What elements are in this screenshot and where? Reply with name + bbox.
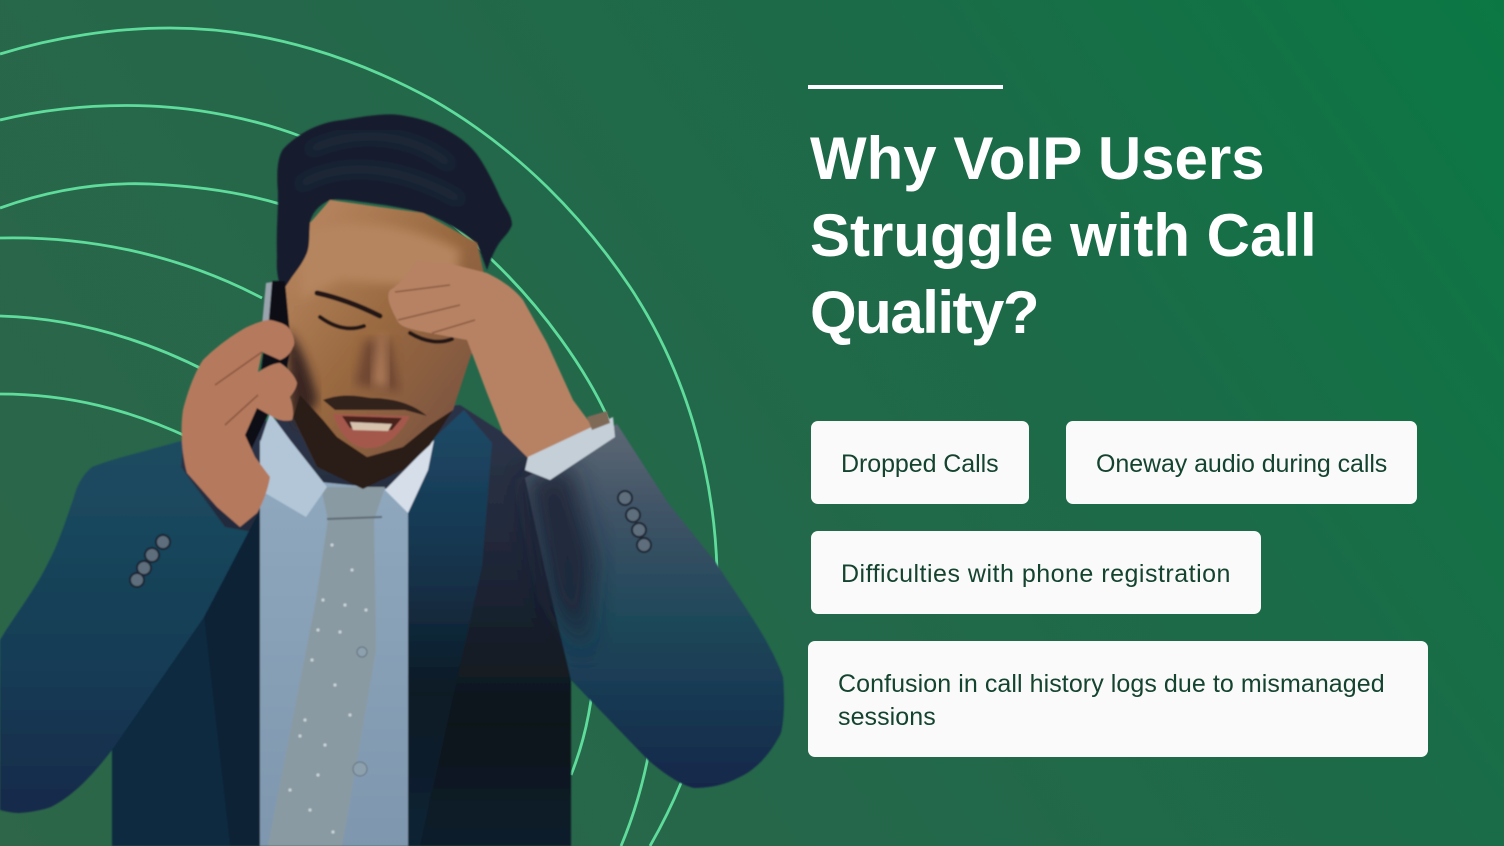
hair [277,114,512,292]
eyes and brows [317,293,452,342]
card: call history: sessions [838,703,936,731]
hand holding phone [182,320,297,527]
accent rule [808,85,1003,89]
card: call history [808,641,1428,757]
cuff buttons left [130,535,170,587]
title: Why VoIP Users [810,125,1265,192]
shirt cuff and watch [525,411,615,480]
tie [268,487,385,846]
shirt buttons [353,647,367,776]
beard [293,395,453,489]
left sleeve [0,440,253,813]
jacket body [112,405,571,846]
card: dropped calls [811,421,1029,504]
mouth [333,414,410,448]
right sleeve [525,424,784,788]
card: phone registration: Difficulties with phone registration [841,560,1231,588]
businessman [0,114,784,846]
phone [237,281,291,467]
card: oneway audio: Oneway audio during calls [1096,450,1387,478]
title: Quality? [810,279,1038,346]
title [810,125,1317,346]
moustache [323,396,427,416]
left lapel [204,510,260,846]
shirt [260,440,432,846]
concentric arcs [0,28,717,846]
card: phone registration [811,531,1261,614]
face [282,200,490,489]
title: Struggle with Call [810,202,1317,269]
hand on forehead [388,260,593,460]
cuff buttons right [618,491,651,552]
right lapel [408,410,492,846]
collar [260,413,327,517]
right sleeve inner shadow [525,465,595,650]
card: dropped calls: Dropped Calls [841,450,999,478]
card: oneway audio [1066,421,1417,504]
card: call history: Confusion in call history logs due to mismanaged [838,670,1385,698]
